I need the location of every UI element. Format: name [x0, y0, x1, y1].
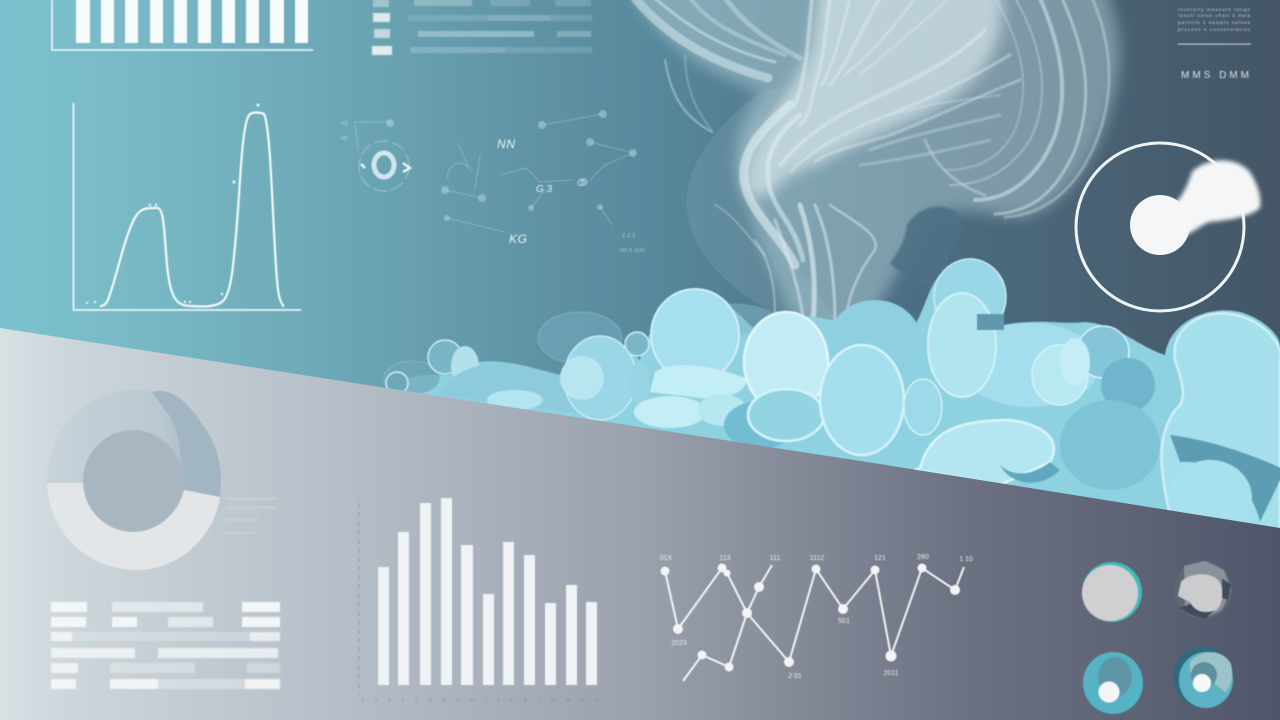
circle: grey with teal crescent [1082, 562, 1142, 622]
text block lines: result value chart 3 data [1178, 13, 1250, 18]
ring outline [1076, 143, 1244, 311]
network diagram [341, 110, 645, 254]
lower bar chart tick labels: 1 1 1 1 1 N K S G I 1 E K L M N O V [361, 698, 599, 704]
line chart value labels: 113 [719, 555, 731, 562]
smoke: soft body [620, 0, 1120, 330]
network: nodes [386, 110, 637, 221]
line chart value labels: 121 [874, 555, 886, 562]
network: links [355, 114, 633, 232]
blue cloud mass [380, 258, 1280, 560]
line chart value labels: 280 [917, 554, 929, 561]
top right text block [1178, 7, 1251, 81]
circle: mosaic grey [1174, 561, 1232, 619]
line chart value labels: 2011 [883, 670, 899, 677]
top data table legend [372, 0, 592, 55]
row 6 [51, 679, 280, 689]
peak chart axes [74, 103, 301, 310]
circle: layered teal with white dot [1173, 646, 1233, 708]
network: labels: 1 2 1 [622, 233, 635, 239]
panel: teal upper background [0, 0, 1280, 560]
donut dark slice [152, 391, 220, 497]
line chart value labels: 501 [838, 618, 850, 625]
lower bar chart bars [378, 498, 597, 685]
text block lines: process 4 concentration [1178, 27, 1250, 32]
smoke: dark opening [890, 207, 961, 288]
status circles [1082, 561, 1233, 714]
network: labels: H3 [341, 121, 348, 127]
ring with two white balls [1076, 143, 1261, 311]
lower bar chart [359, 498, 599, 704]
cloud: dim back blobs [384, 304, 776, 395]
lower left data table [51, 602, 280, 689]
row 1 [51, 602, 280, 612]
row 2 [51, 617, 280, 627]
series B line [683, 565, 772, 681]
line chart value labels [660, 554, 973, 680]
cloud: pale bubbles [440, 259, 1280, 536]
donut pale slice [47, 483, 220, 570]
lower bar chart axis [358, 503, 360, 695]
two linked balls [1130, 160, 1261, 255]
small caption: MMS DMM [1181, 70, 1249, 81]
panel: grey lower background [0, 328, 1280, 720]
top bar chart axes [52, 0, 313, 50]
cloud: outlined bubbles left [386, 332, 649, 394]
network: ring node [359, 141, 410, 191]
smoke: filaments [635, 0, 1109, 330]
row 3 [51, 632, 280, 641]
line chart value labels: 1 10 [959, 556, 973, 563]
legend swatches [372, 0, 392, 55]
top bar chart bars [76, 0, 308, 43]
line chart value labels: 2 01 [788, 673, 802, 680]
text block lines: particle 1 sample values [1178, 20, 1251, 25]
donut centre [83, 430, 183, 532]
peak chart markers [86, 104, 284, 307]
smoke plume [620, 0, 1120, 330]
network: labels: 00 X X00 [620, 248, 645, 254]
network: labels: KG [509, 232, 527, 246]
network: labels: G3 [536, 184, 552, 195]
line chart value labels: 01X [660, 555, 673, 562]
network: labels [341, 121, 645, 254]
cloud: base fill [380, 258, 1280, 560]
multi line chart [660, 554, 973, 681]
smoke: outer transparent veil [687, 90, 835, 330]
top bar chart [52, 0, 313, 50]
peak line chart [74, 103, 301, 310]
row 4 [51, 648, 278, 658]
network: labels: C [577, 178, 585, 189]
text block lines: Intensity measure range [1178, 7, 1250, 12]
network: labels: NN [497, 137, 515, 151]
line chart markers [660, 564, 960, 672]
donut chart [47, 390, 276, 570]
line chart value labels: 111 [770, 555, 780, 562]
legend rows [408, 0, 592, 53]
network: labels: H2 [341, 136, 348, 142]
text block lines [1178, 7, 1251, 32]
line chart value labels: 1112 [810, 555, 824, 562]
divider under text block [1178, 44, 1251, 45]
donut side note [220, 497, 276, 534]
peak chart curve [100, 112, 284, 306]
row 5 [51, 663, 280, 673]
circle: teal with white dot [1083, 652, 1143, 714]
series A line [665, 567, 964, 662]
line chart value labels: 2023 [671, 640, 687, 647]
donut upper ring [47, 390, 221, 570]
smoke: bright core [745, 0, 1002, 198]
